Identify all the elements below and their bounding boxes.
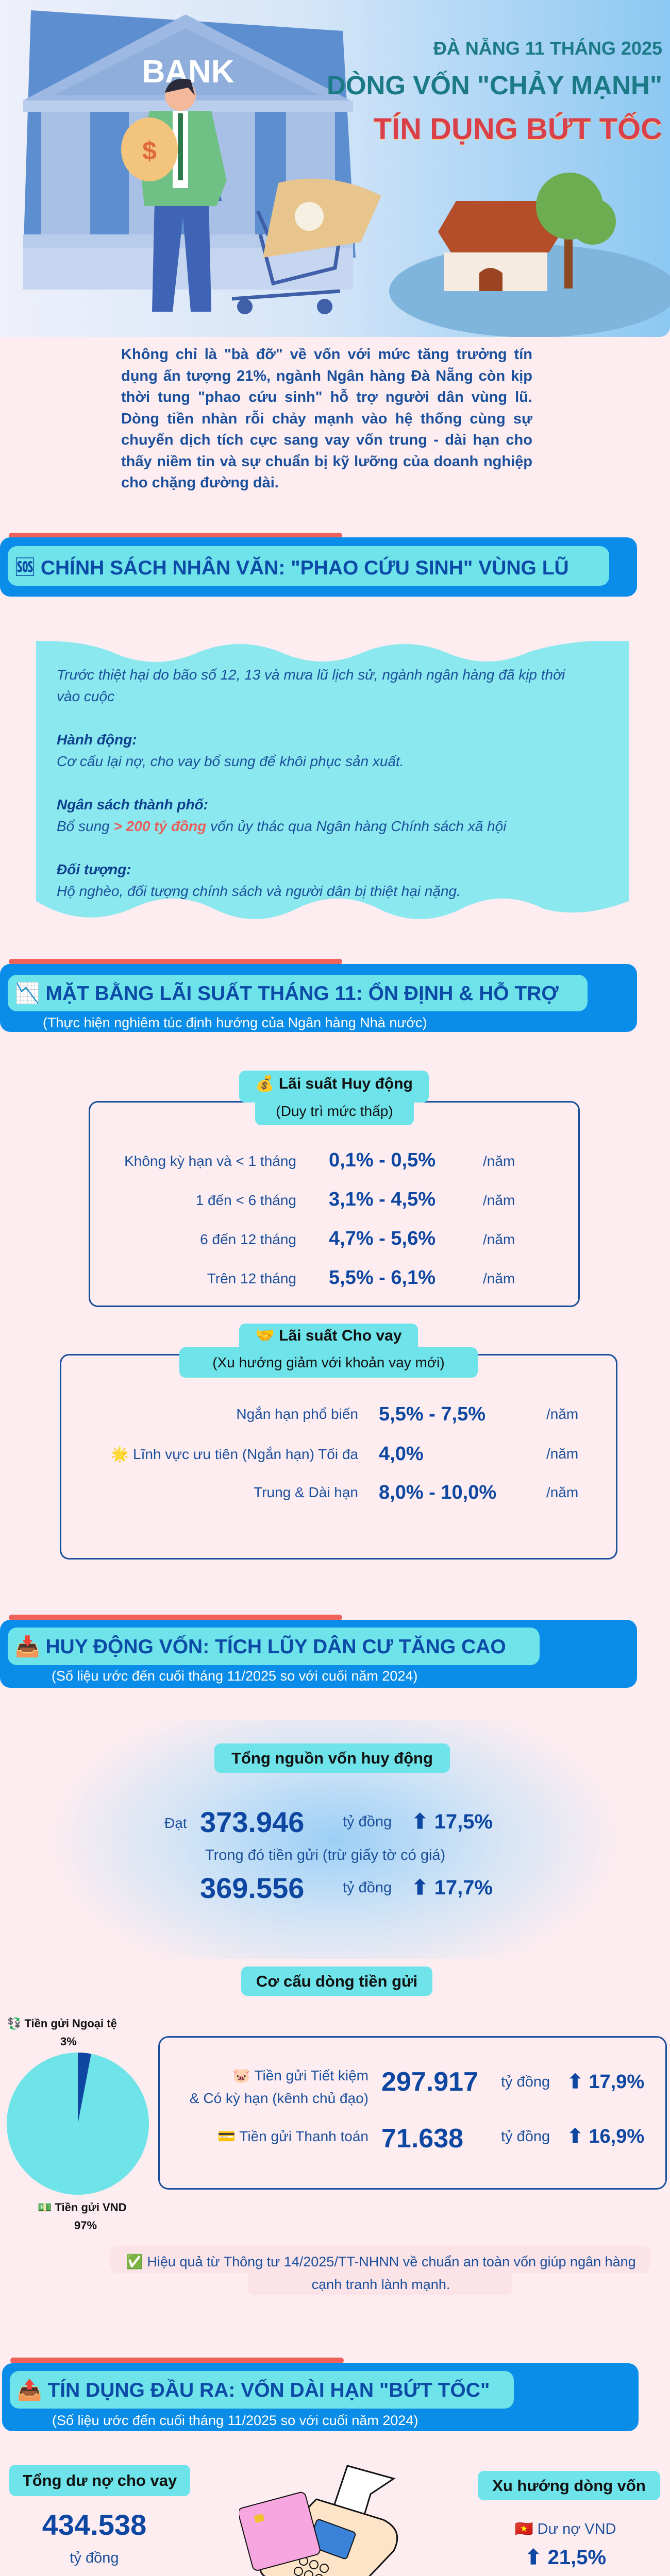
section header: huy dong von — [0, 1620, 637, 1688]
section header: huy dong von: (Số liệu ước đến cuối tháng 11/2025 so với cuối năm 2024) — [52, 1668, 417, 1684]
panel: lai suat huy dong: /năm — [483, 1192, 515, 1208]
panel: deposit breakdown: 💳 Tiền gửi Thanh toán — [217, 2128, 368, 2144]
illustration: bank, man, cart, flooded house — [23, 10, 670, 337]
panel: deposit breakdown: ⬆ 16,9% — [567, 2126, 644, 2147]
panel: tong nguon von: tỷ đồng — [343, 1814, 392, 1830]
heading: co cau dong tien gui: Cơ cấu dòng tiền gửi — [256, 1972, 417, 1990]
panel: deposit breakdown: 297.917 — [381, 2067, 478, 2097]
section header: tin dung dau ra: (Số liệu ước đến cuối tháng 11/2025 so với cuối năm 2024) — [52, 2413, 418, 2428]
panel: lai suat cho vay: Trung & Dài hạn — [254, 1484, 358, 1500]
panel: tong nguon von: tỷ đồng — [343, 1879, 392, 1896]
illustration: bank, man, cart, flooded house: BANK — [142, 54, 234, 90]
panel: tong du no cho vay: tỷ đồng — [70, 2550, 119, 2566]
panel: deposit breakdown: 71.638 — [381, 2124, 463, 2154]
pie chart: deposit currency: 💱 Tiền gửi Ngoại tệ — [7, 2017, 117, 2030]
panel: tong nguon von — [0, 1720, 670, 1959]
panel: lai suat cho vay: 8,0% - 10,0% — [379, 1482, 496, 1503]
panel: lai suat huy dong: /năm — [483, 1270, 515, 1286]
panel: xu huong dong von: ⬆ 21,5% — [525, 2546, 606, 2569]
panel: tong du no cho vay: 434.538 — [42, 2509, 146, 2541]
section header: lai suat: 📉 MẶT BẰNG LÃI SUẤT THÁNG 11: ỔN ĐỊNH & HỖ TRỢ — [15, 982, 559, 1005]
panel: deposit breakdown: tỷ đồng — [501, 2074, 550, 2090]
panel: lai suat cho vay: (Xu hướng giảm với khoản vay mới) — [212, 1354, 445, 1370]
panel: wave policy box: Đối tượng: — [57, 861, 131, 877]
section header: lai suat — [0, 964, 637, 1032]
panel: xu huong dong von: 🇻🇳 Dư nợ VND — [514, 2521, 616, 2537]
hero title block: TÍN DỤNG BỨT TỐC — [374, 112, 662, 146]
panel: lai suat huy dong: 1 đến < 6 tháng — [196, 1192, 296, 1208]
panel: tong nguon von: 373.946 — [200, 1806, 304, 1838]
panel: lai suat huy dong: 5,5% - 6,1% — [329, 1267, 435, 1289]
illustration: bank, man, cart, flooded house: $ — [142, 137, 157, 165]
pie chart: deposit currency: 💵 Tiền gửi VND — [38, 2201, 127, 2214]
panel: xu huong dong von: Xu hướng dòng vốn — [492, 2476, 646, 2495]
panel: tong nguon von: Tổng nguồn vốn huy động — [231, 1749, 433, 1767]
panel: lai suat cho vay — [60, 1324, 617, 1560]
panel: deposit breakdown: & Có kỳ hạn (kênh chủ đạo) — [190, 2090, 368, 2106]
pie chart: deposit currency: 3% — [60, 2035, 77, 2048]
hero title block — [327, 38, 662, 146]
section header: tin dung dau ra — [2, 2363, 639, 2431]
panel: lai suat huy dong: /năm — [483, 1231, 515, 1247]
heading: co cau dong tien gui — [241, 1967, 432, 1996]
panel: lai suat cho vay: /năm — [546, 1406, 578, 1422]
hero banner — [0, 0, 670, 337]
panel: lai suat huy dong: 6 đến 12 tháng — [200, 1231, 296, 1247]
panel: wave policy box: Hộ nghèo, đối tượng chính sách và người dân bị thiệt hại nặng. — [57, 883, 461, 899]
panel: lai suat huy dong: 3,1% - 4,5% — [329, 1189, 435, 1210]
panel: lai suat huy dong: 💰 Lãi suất Huy động — [255, 1075, 413, 1092]
intro paragraph: Không chỉ là "bà đỡ" về vốn với mức tăng trưởng tín dụng ấn tượng 21%, ngành Ngân hàng Đà Nẵng còn kịp thời tung "phao cứu sinh" hỗ trợ người dân vùng lũ. Dòng tiền nhàn rỗi chảy mạnh vào hệ thống cùng sự chuyển dịch tích cực sang vay vốn trung - dài hạn cho thấy niềm tin và sự chuẩn bị kỹ lưỡng của doanh nghiệp cho chặng đường dài. — [121, 346, 532, 491]
panel: wave policy box: Bổ sung > 200 tỷ đồng vốn ủy thác qua Ngân hàng Chính sách xã hội — [57, 818, 506, 834]
icon: POS card terminal — [239, 2465, 398, 2576]
panel: lai suat cho vay: 4,0% — [379, 1443, 424, 1465]
panel: lai suat huy dong: (Duy trì mức thấp) — [276, 1103, 393, 1119]
panel: lai suat cho vay: Ngắn hạn phổ biến — [236, 1406, 358, 1422]
panel: lai suat huy dong: 4,7% - 5,6% — [329, 1228, 435, 1249]
section header: lai suat: (Thực hiện nghiêm túc định hướng của Ngân hàng Nhà nước) — [43, 1015, 427, 1030]
panel: lai suat huy dong: 0,1% - 0,5% — [329, 1149, 435, 1171]
panel: lai suat cho vay: /năm — [546, 1484, 578, 1500]
pie chart: deposit currency: 97% — [74, 2219, 97, 2232]
panel: wave policy box: Trước thiệt hại do bão số 12, 13 và mưa lũ lịch sử, ngành ngân hàng đã kịp thời vào cuộc — [57, 667, 565, 704]
panel: lai suat cho vay: 🤝 Lãi suất Cho vay — [255, 1327, 402, 1344]
panel: wave policy box: Hành động: — [57, 732, 137, 748]
pie chart: deposit currency — [7, 2017, 149, 2232]
panel: tong nguon von: Trong đó tiền gửi (trừ giấy tờ có giá) — [205, 1847, 445, 1863]
panel: deposit breakdown: 🐷 Tiền gửi Tiết kiệm — [232, 2067, 368, 2083]
panel: tong nguon von: ⬆ 17,7% — [411, 1876, 493, 1899]
panel: tong nguon von: Đạt — [164, 1815, 187, 1831]
panel: wave policy box — [36, 641, 629, 919]
callout: thong tu 14: ✅ Hiệu quả từ Thông tư 14/2025/TT-NHNN về chuẩn an toàn vốn giúp ngân hàng cạnh tranh lành mạnh. — [126, 2254, 636, 2292]
panel: tong du no cho vay — [9, 2465, 190, 2576]
hero title block: ĐÀ NẴNG 11 THÁNG 2025 — [433, 38, 662, 59]
panel: lai suat huy dong — [89, 1071, 580, 1307]
panel: deposit breakdown — [158, 2036, 667, 2190]
panel: wave policy box: Ngân sách thành phố: — [57, 796, 208, 812]
panel: lai suat huy dong: /năm — [483, 1153, 515, 1169]
section header: chinh sach nhan van — [0, 537, 637, 597]
hero title block: DÒNG VỐN "CHẢY MẠNH" — [327, 71, 662, 100]
panel: lai suat cho vay: 5,5% - 7,5% — [379, 1403, 485, 1425]
panel: lai suat cho vay: /năm — [546, 1446, 578, 1462]
section header: chinh sach nhan van: 🆘 CHÍNH SÁCH NHÂN VĂN: "PHAO CỨU SINH" VÙNG LŨ — [15, 556, 569, 579]
section header: tin dung dau ra: 📤 TÍN DỤNG ĐẦU RA: VỐN DÀI HẠN "BỨT TỐC" — [17, 2379, 490, 2401]
panel: lai suat huy dong: Trên 12 tháng — [207, 1270, 296, 1286]
section header: huy dong von: 📥 HUY ĐỘNG VỐN: TÍCH LŨY DÂN CƯ TĂNG CAO — [15, 1635, 506, 1658]
panel: tong nguon von: ⬆ 17,5% — [411, 1810, 493, 1833]
panel: tong nguon von: 369.556 — [200, 1872, 304, 1904]
panel: lai suat huy dong: Không kỳ hạn và < 1 tháng — [124, 1153, 296, 1169]
panel: wave policy box: Cơ cấu lại nợ, cho vay bổ sung để khôi phục sản xuất. — [57, 753, 404, 769]
panel: lai suat cho vay: 🌟 Lĩnh vực ưu tiên (Ngắn hạn) Tối đa — [111, 1446, 358, 1462]
panel: deposit breakdown: tỷ đồng — [501, 2128, 550, 2145]
panel: xu huong dong von — [478, 2471, 660, 2569]
panel: tong du no cho vay: Tổng dư nợ cho vay — [23, 2471, 177, 2489]
panel: deposit breakdown: ⬆ 17,9% — [567, 2071, 644, 2093]
